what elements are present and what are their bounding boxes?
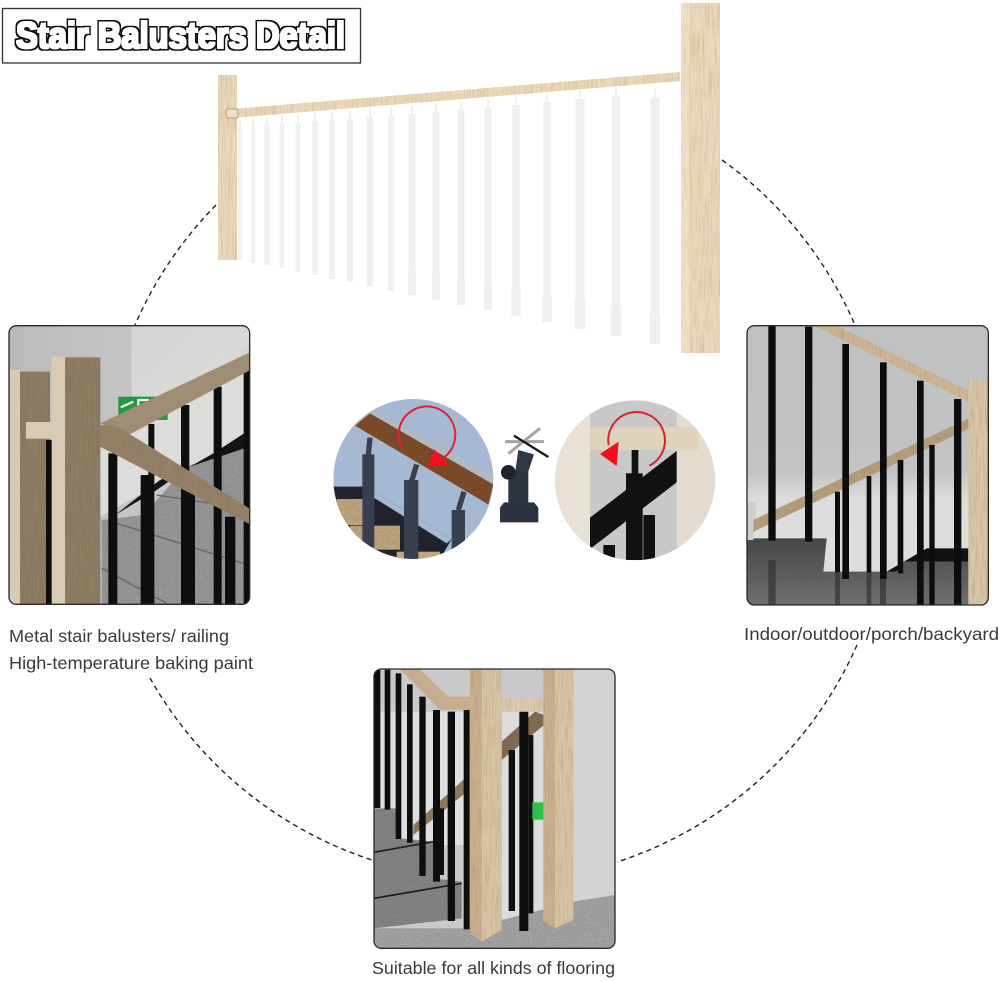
floor	[374, 895, 615, 948]
arrow: rotation right	[600, 412, 665, 466]
newel post	[968, 379, 988, 605]
stairs	[374, 808, 462, 928]
handrail left	[400, 669, 470, 710]
left newel post	[218, 75, 237, 260]
circle: angled handrail	[333, 399, 493, 560]
caption: right panel: Indoor/outdoor/porch/backyard	[744, 624, 999, 644]
stairs	[102, 445, 249, 604]
icon: adjustable bracket	[500, 428, 548, 522]
dashed circle connecting the panels	[135, 160, 857, 862]
caption: left panel line two: High-temperature baking paint	[9, 653, 253, 673]
black balusters	[108, 370, 250, 604]
far post	[10, 370, 20, 604]
exit sign	[118, 397, 168, 420]
handrail	[232, 72, 680, 118]
panel: metal balusters (left)	[9, 326, 250, 604]
upper rail	[815, 326, 968, 402]
title	[2, 8, 360, 63]
railing illustration	[218, 3, 720, 353]
balusters	[374, 670, 533, 931]
rotating bracket detail	[333, 399, 715, 560]
rails	[100, 353, 249, 435]
caption: bottom panel: Suitable for all kinds of flooring	[372, 958, 615, 978]
exit sign	[532, 802, 544, 820]
back rail	[502, 712, 544, 760]
caption: left panel: Metal stair balusters/ railing	[9, 626, 229, 646]
panel: indoor/outdoor stairs (right)	[747, 326, 988, 605]
balusters	[768, 326, 961, 605]
posts	[470, 669, 482, 942]
panel: flooring (bottom)	[374, 669, 615, 948]
near post	[52, 357, 66, 604]
circle: flat handrail	[555, 400, 715, 560]
title: Stair Balusters Detail	[16, 15, 345, 56]
arrow: rotation left	[399, 406, 455, 467]
handrail end cap	[226, 109, 238, 118]
stair treads	[747, 538, 988, 605]
white balusters	[240, 88, 655, 344]
right newel post	[681, 3, 720, 353]
lower rail	[753, 418, 968, 532]
